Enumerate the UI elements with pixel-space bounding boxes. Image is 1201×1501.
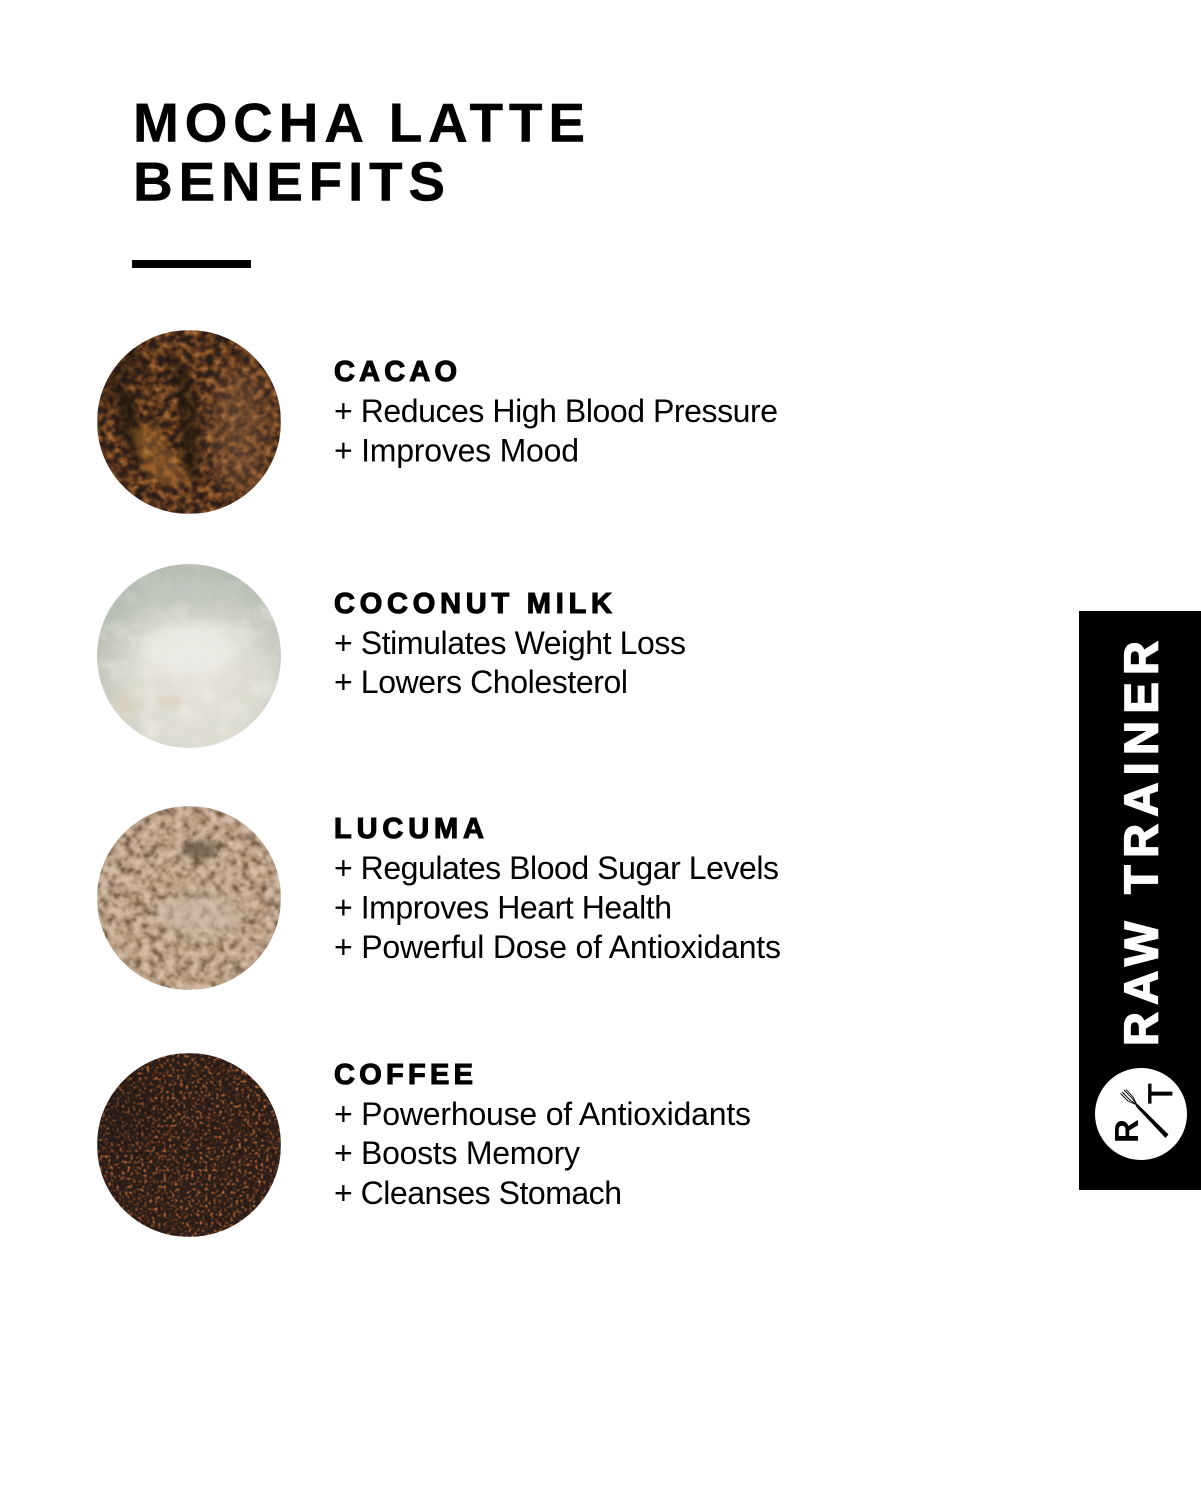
- heading: cacao: CACAO: [334, 356, 457, 388]
- ingredient: cacao: [334, 356, 778, 468]
- heading: lucuma: LUCUMA: [334, 813, 484, 845]
- benefits: lucuma: + Regulates Blood Sugar Levels: [334, 850, 779, 886]
- ingredient: coffee: [334, 1059, 751, 1211]
- benefits: cacao: [334, 393, 778, 468]
- benefits: coffee: + Boosts Memory: [334, 1135, 580, 1171]
- benefits: cacao: + Improves Mood: [334, 432, 579, 468]
- photo: lucuma powder: [97, 806, 281, 990]
- photo: coffee grounds: [97, 1053, 281, 1237]
- logo: RT fork badge: T: [1142, 1083, 1180, 1104]
- logo: RT fork badge: [1095, 1068, 1187, 1160]
- benefits: lucuma: + Powerful Dose of Antioxidants: [334, 929, 781, 965]
- ingredient: coconut milk: [334, 588, 686, 700]
- title: MOCHA LATTE: [133, 92, 585, 154]
- benefits: coffee: + Cleanses Stomach: [334, 1175, 622, 1211]
- benefits: lucuma: [334, 850, 781, 965]
- heading: coffee: COFFEE: [334, 1059, 473, 1091]
- brand sidebar: [1079, 611, 1201, 1190]
- title: BENEFITS: [133, 150, 445, 212]
- benefits: cacao: + Reduces High Blood Pressure: [334, 393, 778, 429]
- benefits: coconut milk: + Stimulates Weight Loss: [334, 625, 686, 661]
- benefits: coffee: [334, 1096, 751, 1211]
- heading: coconut milk: COCONUT MILK: [334, 588, 612, 620]
- ingredient: lucuma: [334, 813, 781, 965]
- title: [133, 92, 585, 212]
- benefits: lucuma: + Improves Heart Health: [334, 890, 672, 926]
- title underline rule: [132, 260, 251, 268]
- photo: cacao powder: [97, 330, 281, 514]
- benefits: coconut milk: [334, 625, 686, 700]
- benefits: coffee: + Powerhouse of Antioxidants: [334, 1096, 751, 1132]
- benefits: coconut milk: + Lowers Cholesterol: [334, 664, 628, 700]
- logo: RT fork badge: R: [1108, 1119, 1145, 1143]
- brand name: RAW TRAINER: [1114, 641, 1168, 1046]
- photo: coconut milk powder: [97, 564, 281, 748]
